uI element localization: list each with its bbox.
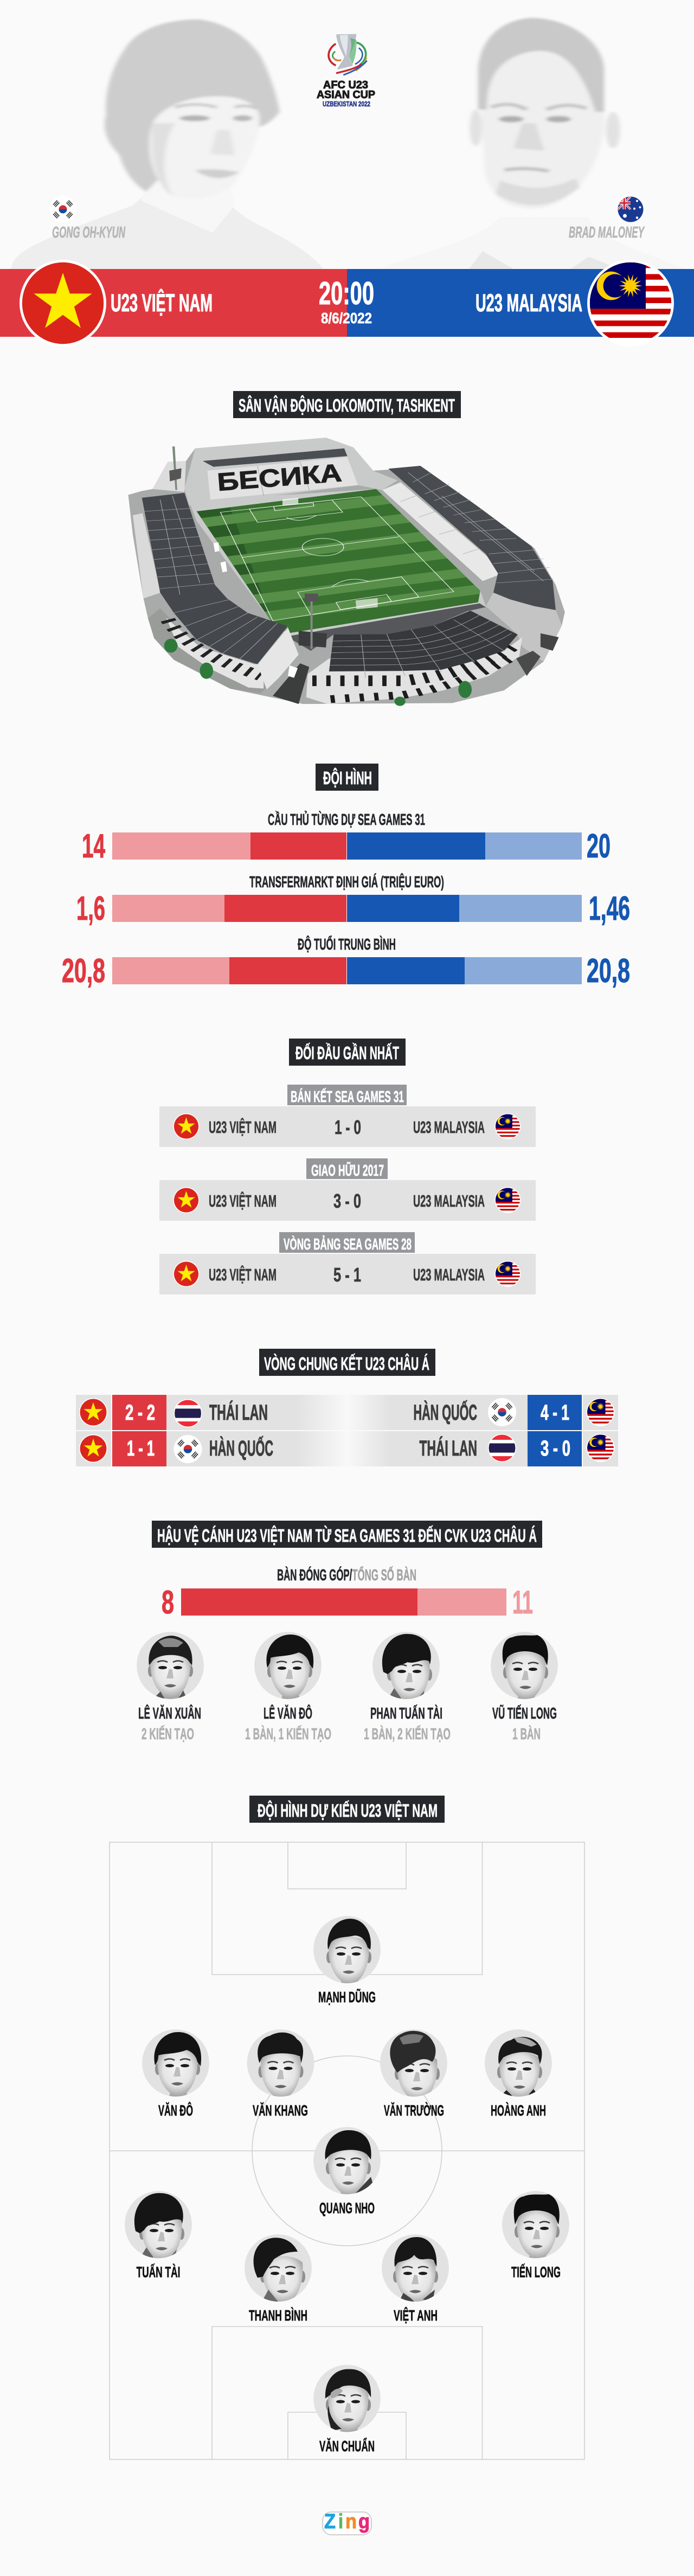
header: coaches and match	[0, 18, 694, 347]
match row: SEA Games 28 group stage	[159, 1232, 536, 1295]
player: Hoàng Anh	[485, 2029, 552, 2119]
flag: Vietnam	[20, 260, 106, 347]
stat: Transfermarkt value	[76, 873, 630, 927]
football pitch lines	[110, 1842, 584, 2459]
match row: SEA Games 28 group stage: U23 VIỆT NAM	[209, 1265, 277, 1284]
heading: squad	[316, 764, 378, 791]
player: Vũ Tiến Long	[491, 1632, 558, 1743]
coach photo: Brad Maloney	[381, 18, 686, 269]
goals contribution bar	[162, 1566, 533, 1620]
player: Phan Tuấn Tài: 1 BÀN, 2 KIẾN TẠO	[364, 1725, 451, 1743]
stat: SEA Games 31 players: 20	[587, 828, 611, 865]
match row: 2017 friendly: U23 MALAYSIA	[413, 1192, 485, 1210]
stat: average age: 20,8	[62, 952, 105, 990]
player: Lê Văn Đô	[245, 1632, 331, 1743]
player: Văn Đô	[142, 2029, 209, 2119]
coach photo: Gong Oh-kyun	[11, 20, 323, 269]
player: Mạnh Dũng	[313, 1916, 381, 2005]
heading: stadium	[233, 391, 461, 418]
flag: South Korea	[49, 196, 76, 223]
kick-off time: 20:00	[319, 275, 374, 311]
player: Lê Văn Xuân	[137, 1632, 204, 1743]
finals row 2	[76, 1431, 618, 1466]
stat: average age	[62, 935, 630, 990]
stat: SEA Games 31 players: CẦU THỦ TỪNG DỰ SEA GAMES 31	[268, 810, 425, 829]
heading: squad: ĐỘI HÌNH	[323, 767, 372, 788]
player: Phan Tuấn Tài: PHAN TUẤN TÀI	[370, 1704, 442, 1722]
heading: U23 Asian Cup finals: VÒNG CHUNG KẾT U23 CHÂU Á	[264, 1354, 429, 1374]
stat: Transfermarkt value: TRANSFERMARKT ĐỊNH GIÁ (TRIỆU EURO)	[249, 873, 444, 891]
match row: SEA Games 31 semi-final	[159, 1085, 536, 1147]
Zing logo	[323, 2510, 371, 2535]
player: Việt Anh: VIỆT ANH	[394, 2307, 438, 2324]
finals row 1	[76, 1395, 618, 1430]
Zing logo: g	[358, 2510, 370, 2533]
player: Lê Văn Xuân: LÊ VĂN XUÂN	[138, 1704, 201, 1722]
player: Văn Chuẩn	[313, 2364, 381, 2455]
stat: average age: 20,8	[587, 952, 630, 990]
finals row 2: THÁI LAN	[420, 1436, 477, 1460]
player: Văn Khang	[247, 2029, 314, 2119]
player: Phan Tuấn Tài	[364, 1632, 451, 1743]
match row: SEA Games 28 group stage: 5 - 1	[333, 1264, 361, 1286]
finals row 1: 2 - 2	[125, 1401, 155, 1425]
player: Văn Trường: VĂN TRƯỜNG	[384, 2102, 444, 2119]
AFC U23 Asian Cup logo: ASIAN CUP	[317, 89, 375, 101]
team name: U23 Malaysia: U23 MALAYSIA	[475, 289, 582, 317]
stadium illustration	[128, 438, 565, 706]
AFC U23 Asian Cup logo: UZBEKISTAN 2022	[323, 100, 370, 108]
match date: 8/6/2022	[321, 310, 372, 326]
coach name: Gong Oh-kyun: GONG OH-KYUN	[52, 224, 126, 241]
team bar: blue	[347, 269, 694, 337]
stat: SEA Games 31 players: 14	[82, 828, 105, 865]
logo text: AFC U23	[323, 79, 368, 91]
AFC U23 Asian Cup logo	[317, 34, 375, 108]
player: Tiến Long	[502, 2191, 569, 2280]
player: Thanh Bình: THANH BÌNH	[249, 2307, 307, 2324]
player: Lê Văn Đô: 1 BÀN, 1 KIẾN TẠO	[245, 1725, 331, 1743]
stat: Transfermarkt value: 1,6	[76, 890, 105, 927]
player: Văn Chuẩn: VĂN CHUẨN	[319, 2438, 375, 2455]
stat: SEA Games 31 players	[82, 810, 611, 865]
flag: Malaysia	[587, 260, 674, 347]
stat: average age: ĐỘ TUỔI TRUNG BÌNH	[298, 935, 396, 953]
player: Vũ Tiến Long: 1 BÀN	[512, 1725, 541, 1743]
finals row 1: THÁI LAN	[209, 1400, 268, 1425]
team bar: red	[0, 269, 347, 337]
stand lettering: БЕСИКА	[216, 458, 343, 496]
heading: recent head-to-head	[289, 1039, 406, 1066]
heading: wing-backs	[152, 1521, 542, 1548]
heading: stadium: SÂN VẬN ĐỘNG LOKOMOTIV, TASHKENT	[239, 395, 455, 415]
coach name: Brad Maloney: BRAD MALONEY	[569, 224, 645, 241]
player: Tiến Long: TIẾN LONG	[511, 2264, 561, 2280]
finals row 2: 1 - 1	[127, 1437, 155, 1460]
match row: SEA Games 31 semi-final: BÁN KẾT SEA GAMES 31	[291, 1087, 404, 1106]
stat: Transfermarkt value: 1,46	[589, 890, 630, 927]
player: Tuấn Tài	[125, 2191, 192, 2280]
match row: 2017 friendly	[159, 1158, 536, 1221]
heading: recent head-to-head: ĐỐI ĐẦU GẦN NHẤT	[295, 1042, 399, 1063]
player: Văn Trường	[380, 2029, 447, 2119]
finals row 1: HÀN QUỐC	[413, 1400, 477, 1425]
match row: SEA Games 28 group stage: U23 MALAYSIA	[413, 1266, 485, 1284]
heading: U23 Asian Cup finals	[259, 1349, 435, 1376]
player: Lê Văn Đô: LÊ VĂN ĐÔ	[264, 1704, 312, 1722]
player: Hoàng Anh: HOÀNG ANH	[491, 2102, 546, 2119]
match row: 2017 friendly: GIAO HỮU 2017	[311, 1161, 384, 1180]
match row: SEA Games 31 semi-final: 1 - 0	[335, 1116, 361, 1138]
Zing logo: n	[345, 2510, 357, 2533]
player: Việt Anh	[382, 2234, 449, 2324]
player: Mạnh Dũng: MẠNH DŨNG	[318, 1989, 376, 2005]
flag: Australia	[618, 196, 643, 222]
player: Tuấn Tài: TUẤN TÀI	[137, 2264, 180, 2280]
match row: SEA Games 31 semi-final: U23 VIỆT NAM	[209, 1117, 277, 1137]
finals row 2: 3 - 0	[541, 1437, 570, 1460]
team name: U23 Việt Nam: U23 VIỆT NAM	[111, 289, 213, 317]
match row: 2017 friendly: 3 - 0	[333, 1190, 361, 1212]
match row: SEA Games 31 semi-final: U23 MALAYSIA	[413, 1118, 485, 1137]
player: Quang Nho: QUANG NHO	[319, 2200, 375, 2216]
finals row 1: 4 - 1	[541, 1401, 569, 1425]
match row: SEA Games 28 group stage: VÒNG BẢNG SEA GAMES 28	[284, 1235, 412, 1253]
player: Thanh Bình	[245, 2234, 312, 2324]
Zing logo: Z	[324, 2510, 336, 2533]
heading: expected lineup: ĐỘI HÌNH DỰ KIẾN U23 VIỆT NAM	[258, 1800, 438, 1821]
player: Vũ Tiến Long: VŨ TIẾN LONG	[492, 1704, 557, 1722]
player: Quang Nho	[313, 2127, 381, 2216]
Zing logo: i	[338, 2510, 343, 2533]
goals contribution bar: BÀN ĐÓNG GÓP/TỔNG SỐ BÀN	[277, 1566, 416, 1584]
goals contribution bar: 11	[512, 1584, 533, 1620]
heading: expected lineup	[249, 1796, 445, 1823]
goals contribution bar: 8	[162, 1584, 174, 1620]
match row: 2017 friendly: U23 VIỆT NAM	[209, 1191, 277, 1210]
player: Văn Đô: VĂN ĐÔ	[158, 2101, 193, 2119]
player: Lê Văn Xuân: 2 KIẾN TẠO	[142, 1725, 194, 1743]
logo: trophy and rings	[329, 34, 367, 75]
finals row 2: HÀN QUỐC	[209, 1436, 273, 1460]
player: Văn Khang: VĂN KHANG	[253, 2102, 308, 2119]
